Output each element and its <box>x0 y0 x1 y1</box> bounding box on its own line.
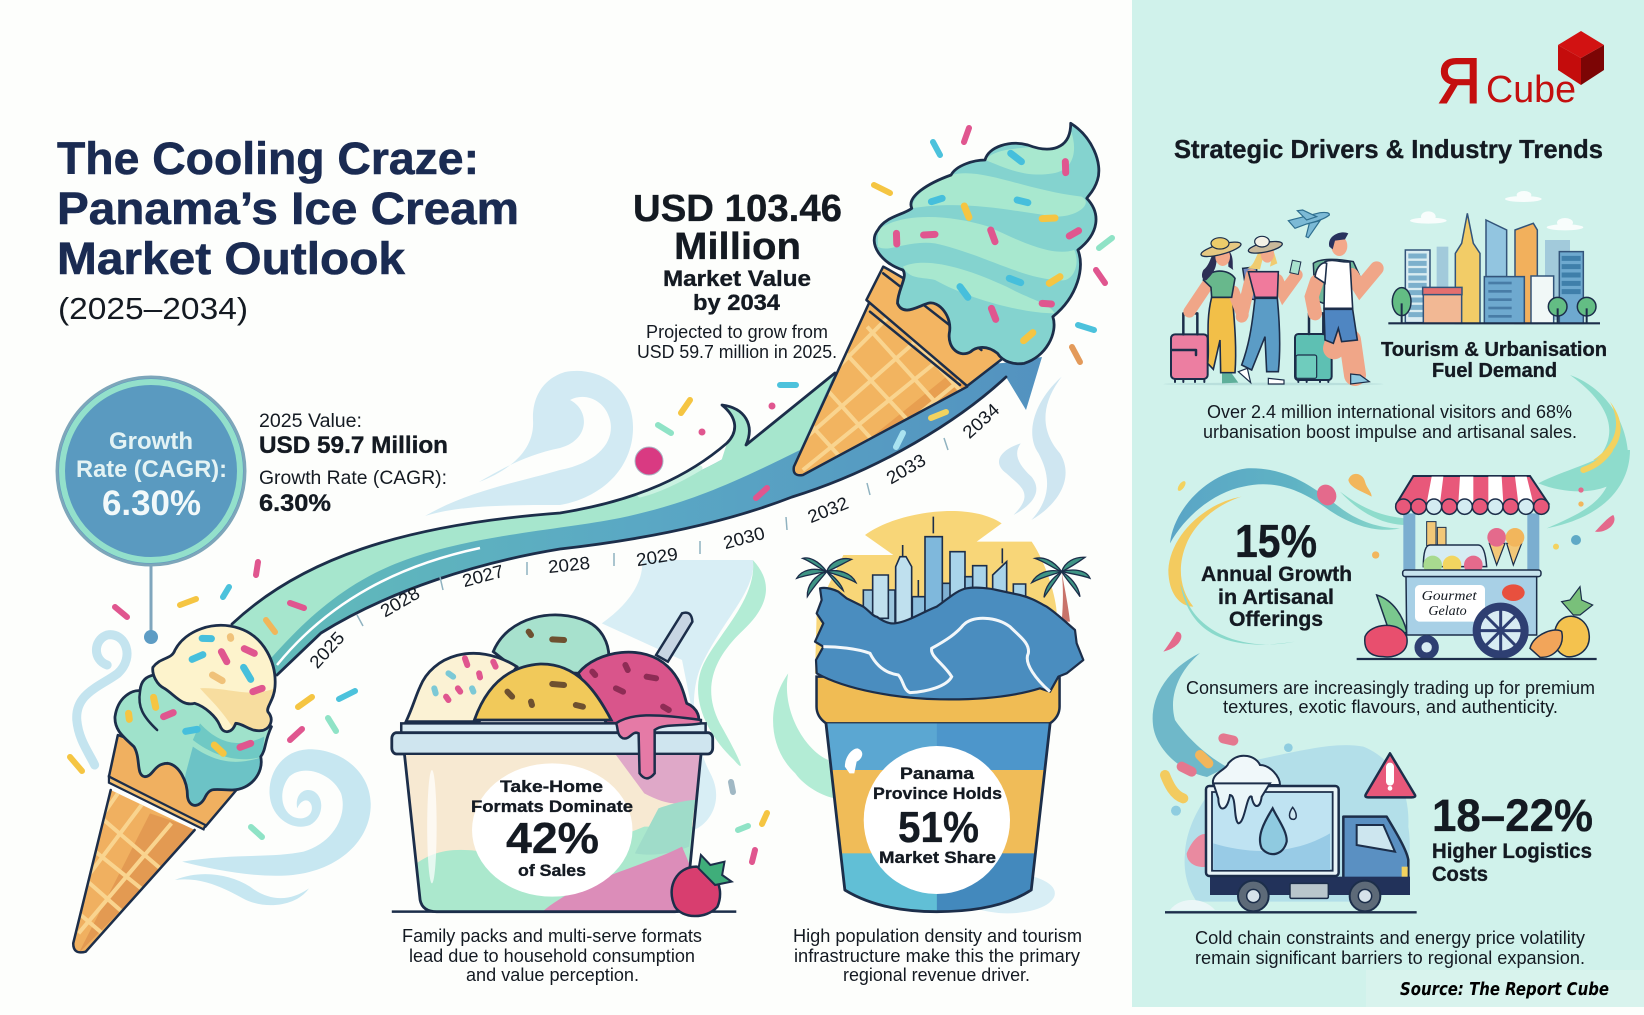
panel heading: Strategic Drivers & Industry Trends <box>1174 134 1603 164</box>
title: (2025–2034) <box>58 291 248 326</box>
tourism body text: Over 2.4 million international visitors and 68% <box>1207 402 1572 422</box>
logo <box>1437 31 1604 117</box>
year axis labels: 2034 <box>959 400 1003 442</box>
growth rate circle: 6.30% <box>102 484 201 523</box>
icon: small ice cream cone <box>71 625 279 953</box>
2025 value and CAGR text <box>259 411 448 517</box>
logistics body text: remain significant barriers to regional expansion. <box>1195 948 1585 968</box>
swirl behind small cone <box>77 635 371 905</box>
tub label: Formats Dominate <box>471 797 633 816</box>
2025 value and CAGR text: 2025 Value: <box>259 411 362 432</box>
year axis labels: 2028 <box>377 583 423 621</box>
tub caption: Family packs and multi-serve formats <box>402 926 702 946</box>
tub label: 42% <box>506 814 599 863</box>
decorative swooshes around artisanal section <box>1163 450 1630 652</box>
artisanal body text <box>1186 678 1595 717</box>
artisanal stat: Annual Growth <box>1201 563 1352 586</box>
year axis labels: 2025 <box>306 628 348 672</box>
logistics stat <box>1432 790 1593 886</box>
logistics body text: Cold chain constraints and energy price volatility <box>1195 928 1585 948</box>
pot label: Province Holds <box>873 784 1002 803</box>
year axis labels: 2030 <box>721 523 767 553</box>
decorative crescent under tourism section <box>1570 375 1628 460</box>
2025 value and CAGR text: USD 59.7 Million <box>259 432 448 459</box>
tourism body text: urbanisation boost impulse and artisanal sales. <box>1203 422 1577 442</box>
pot caption: regional revenue driver. <box>843 965 1030 985</box>
2025 value and CAGR text: 6.30% <box>259 490 331 517</box>
crescent above truck <box>1153 653 1227 777</box>
sprinkles <box>70 128 1112 862</box>
growth rate circle: Growth <box>109 428 193 455</box>
tub label <box>471 777 633 880</box>
icon: gelato cart: Gourmet <box>1422 588 1477 603</box>
artisanal body text: textures, exotic flavours, and authenticity. <box>1223 697 1558 717</box>
pot caption <box>793 926 1082 985</box>
icon: tourists <box>1163 210 1383 385</box>
tub caption: and value perception. <box>466 965 639 985</box>
year axis labels <box>306 400 1003 672</box>
icon: gelato cart: Gelato <box>1428 603 1467 618</box>
wash behind tub and pot <box>602 560 1055 913</box>
year axis labels: 2029 <box>635 544 679 570</box>
market value callout <box>633 188 842 362</box>
artisanal stat: in Artisanal <box>1218 586 1334 609</box>
artisanal stat <box>1201 515 1352 631</box>
icon: berry and dots <box>635 402 776 475</box>
pot caption: High population density and tourism <box>793 926 1082 946</box>
tub label: Take-Home <box>500 777 603 796</box>
logistics body text <box>1195 928 1585 968</box>
icon: refrigerated truck <box>1165 738 1417 912</box>
tub caption <box>402 926 702 985</box>
artisanal body text: Consumers are increasingly trading up for premium <box>1186 678 1595 698</box>
icon: large soft-serve cone <box>789 123 1099 487</box>
pot label <box>873 764 1002 867</box>
tourism heading: Tourism & Urbanisation <box>1381 339 1607 361</box>
title: Panama’s Ice Cream <box>57 183 519 234</box>
year axis labels: 2027 <box>460 561 506 591</box>
market value callout: by 2034 <box>693 290 781 315</box>
growth rate circle <box>57 377 245 644</box>
logo: Cube <box>1486 69 1576 111</box>
tourism heading: Fuel Demand <box>1432 360 1557 382</box>
tourism heading <box>1381 339 1607 382</box>
growth rate circle: Rate (CAGR): <box>76 456 227 483</box>
market value callout: Market Value <box>663 266 811 291</box>
market value callout: USD 103.46 <box>633 188 842 230</box>
background swirl near the ribbon <box>425 371 633 516</box>
year axis labels: 2032 <box>805 493 851 527</box>
tub caption: lead due to household consumption <box>409 946 695 966</box>
market value callout: USD 59.7 million in 2025. <box>637 342 837 362</box>
year axis labels: 2028 <box>547 553 591 577</box>
logistics stat: 18–22% <box>1432 790 1593 841</box>
market value callout: Projected to grow from <box>646 322 828 342</box>
logistics stat: Higher Logistics <box>1432 840 1592 863</box>
tourism body text <box>1203 402 1577 442</box>
icon: gelato cart <box>1357 476 1597 659</box>
pot caption: infrastructure make this the primary <box>794 946 1080 966</box>
tub label: of Sales <box>518 861 586 880</box>
artisanal stat: Offerings <box>1229 608 1323 631</box>
market value callout: Million <box>674 226 801 268</box>
artisanal stat: 15% <box>1235 515 1317 567</box>
growth ribbon arrow <box>232 357 1042 675</box>
pot label: Panama <box>900 764 975 783</box>
icon: Panama skyline with sun and palms <box>797 511 1090 673</box>
wisps right of the large cone <box>999 377 1066 520</box>
icon: city skyline <box>1388 191 1600 323</box>
title: The Cooling Craze: <box>57 133 479 184</box>
icon: take-home ice cream tub <box>392 613 736 916</box>
panel: strategic drivers background <box>1132 0 1644 1007</box>
icon: ice cream pot <box>817 677 1060 917</box>
title: Market Outlook <box>57 233 406 284</box>
title <box>57 133 519 326</box>
logo: Я <box>1437 45 1481 117</box>
2025 value and CAGR text: Growth Rate (CAGR): <box>259 468 447 489</box>
icon: Panama map <box>815 588 1083 699</box>
year axis labels: 2033 <box>883 450 929 488</box>
logistics stat: Costs <box>1432 863 1488 886</box>
pot label: Market Share <box>879 848 996 867</box>
pot label: 51% <box>898 803 979 852</box>
